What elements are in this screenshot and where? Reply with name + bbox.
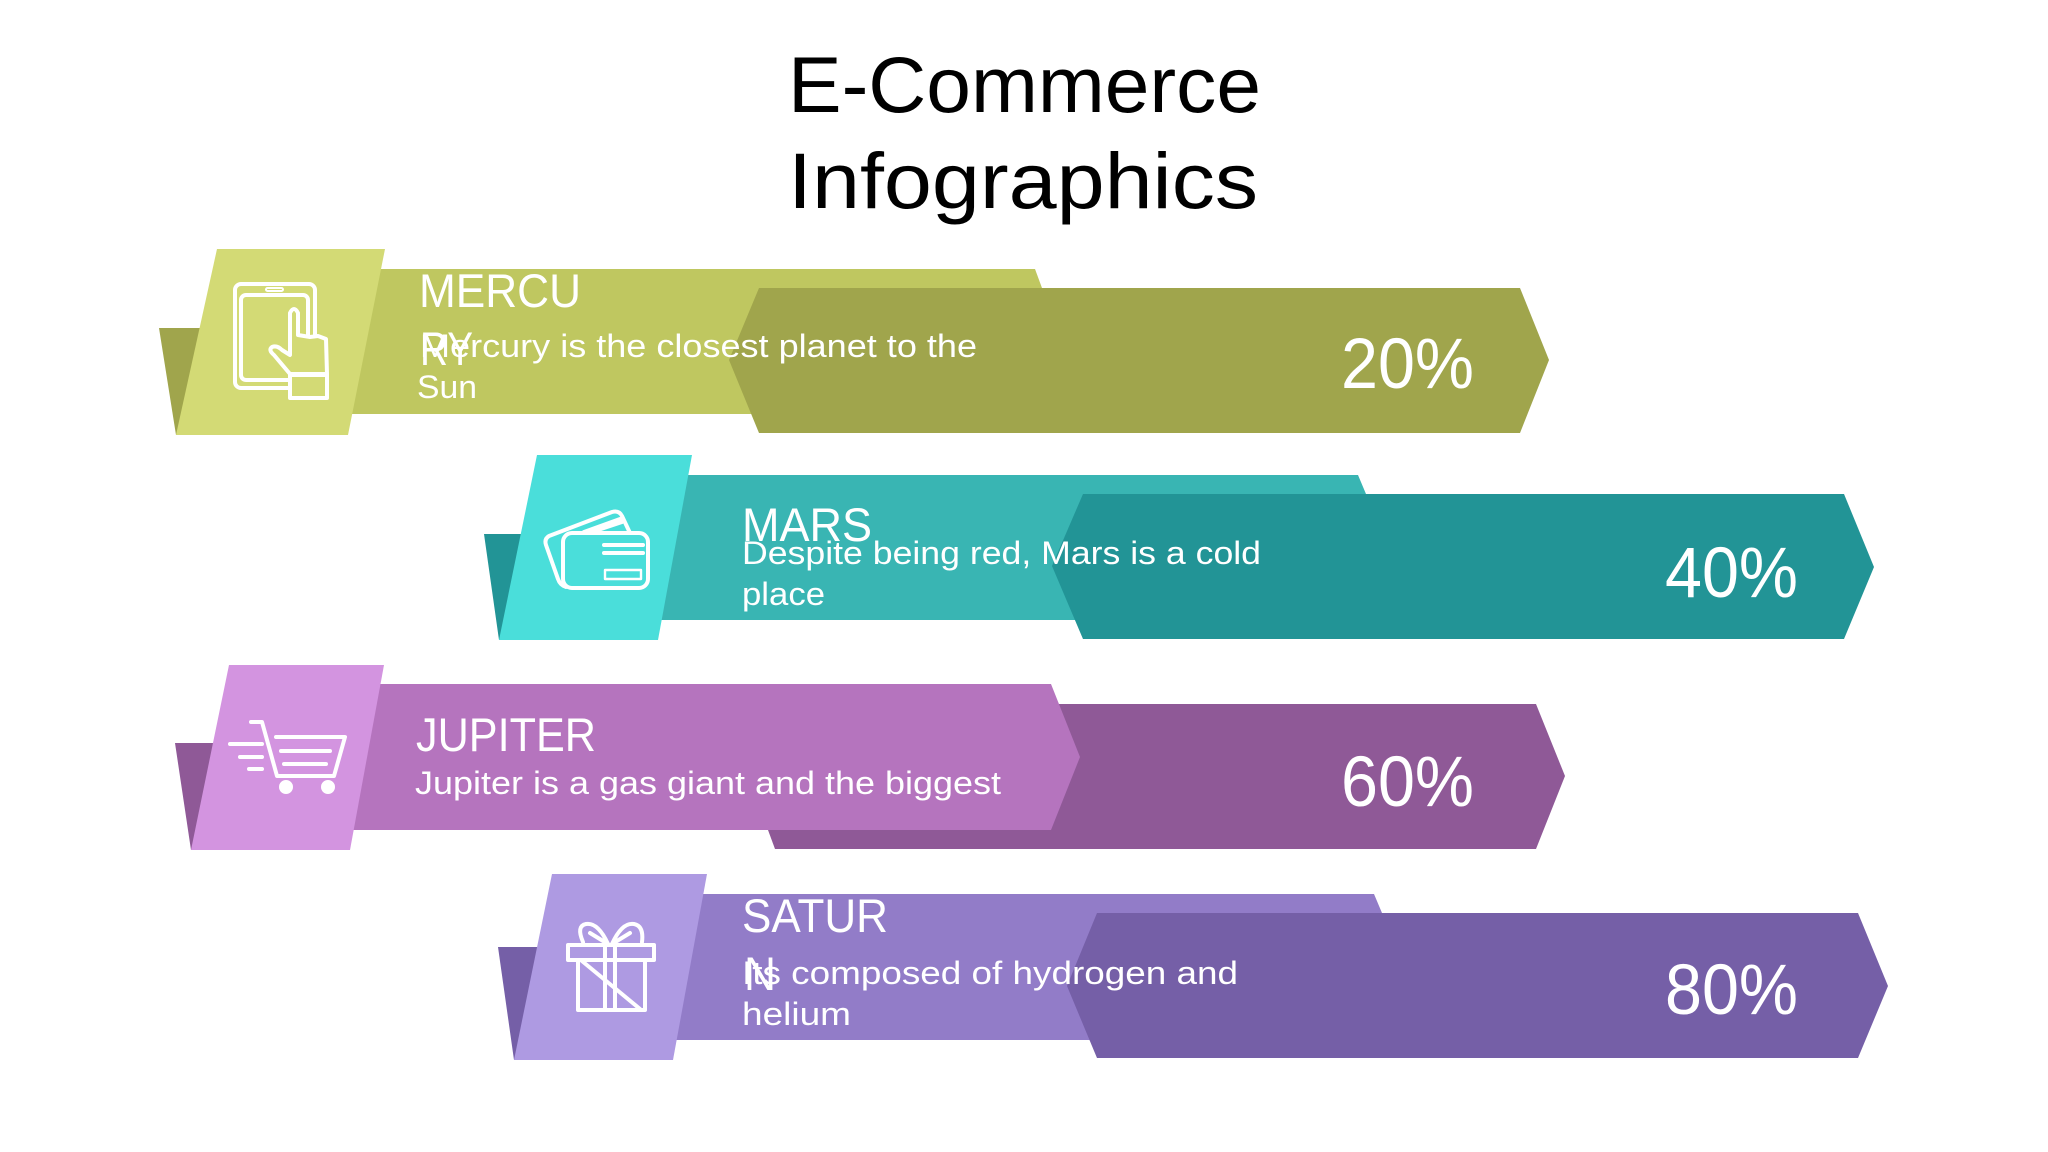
label wrap: N xyxy=(744,947,776,1000)
back fold xyxy=(498,947,560,1060)
light banner xyxy=(340,684,1080,830)
description xyxy=(742,535,1261,612)
panel: jupiter xyxy=(175,665,1565,850)
description: Despite being red, Mars is a cold xyxy=(742,535,1261,571)
icon tile xyxy=(514,874,707,1060)
title: Infographics xyxy=(788,136,1258,225)
description: helium xyxy=(742,996,851,1032)
icon tile xyxy=(499,455,692,640)
icon: gift box xyxy=(568,924,654,1010)
description: Mercury is the closest planet to the xyxy=(420,328,977,364)
panel: saturn xyxy=(498,874,1888,1060)
back fold xyxy=(159,328,240,435)
description xyxy=(742,955,1238,1032)
icon tile xyxy=(191,665,384,850)
back fold xyxy=(484,534,560,640)
panel: mercury xyxy=(159,249,1549,435)
description: Sun xyxy=(417,369,477,405)
back fold xyxy=(175,743,250,850)
title: E-Commerce xyxy=(788,40,1261,129)
label: MERCU xyxy=(419,264,581,317)
description: Jupiter is a gas giant and the biggest xyxy=(415,765,1001,801)
value: 20% xyxy=(1341,325,1474,404)
light banner xyxy=(650,894,1382,1040)
icon: credit cards xyxy=(545,512,648,588)
label: MARS xyxy=(742,498,872,551)
icon: tablet with hand xyxy=(235,284,327,398)
dark arrow xyxy=(1067,913,1888,1058)
icon tile xyxy=(176,249,385,435)
label wrap: RY xyxy=(420,322,473,375)
title xyxy=(788,40,1261,225)
value: 80% xyxy=(1665,951,1798,1030)
dark arrow xyxy=(760,704,1565,849)
description xyxy=(417,328,977,405)
light banner xyxy=(640,475,1366,620)
icon: shopping cart xyxy=(230,722,345,792)
light banner xyxy=(300,269,1042,414)
panel: mars xyxy=(484,455,1874,640)
value: 40% xyxy=(1665,534,1798,613)
value: 60% xyxy=(1341,743,1474,822)
dark arrow xyxy=(729,288,1549,433)
description: place xyxy=(742,576,825,612)
dark arrow xyxy=(1052,494,1874,639)
description: Its composed of hydrogen and xyxy=(742,955,1238,991)
label: SATUR xyxy=(742,889,888,942)
label: JUPITER xyxy=(416,708,596,761)
